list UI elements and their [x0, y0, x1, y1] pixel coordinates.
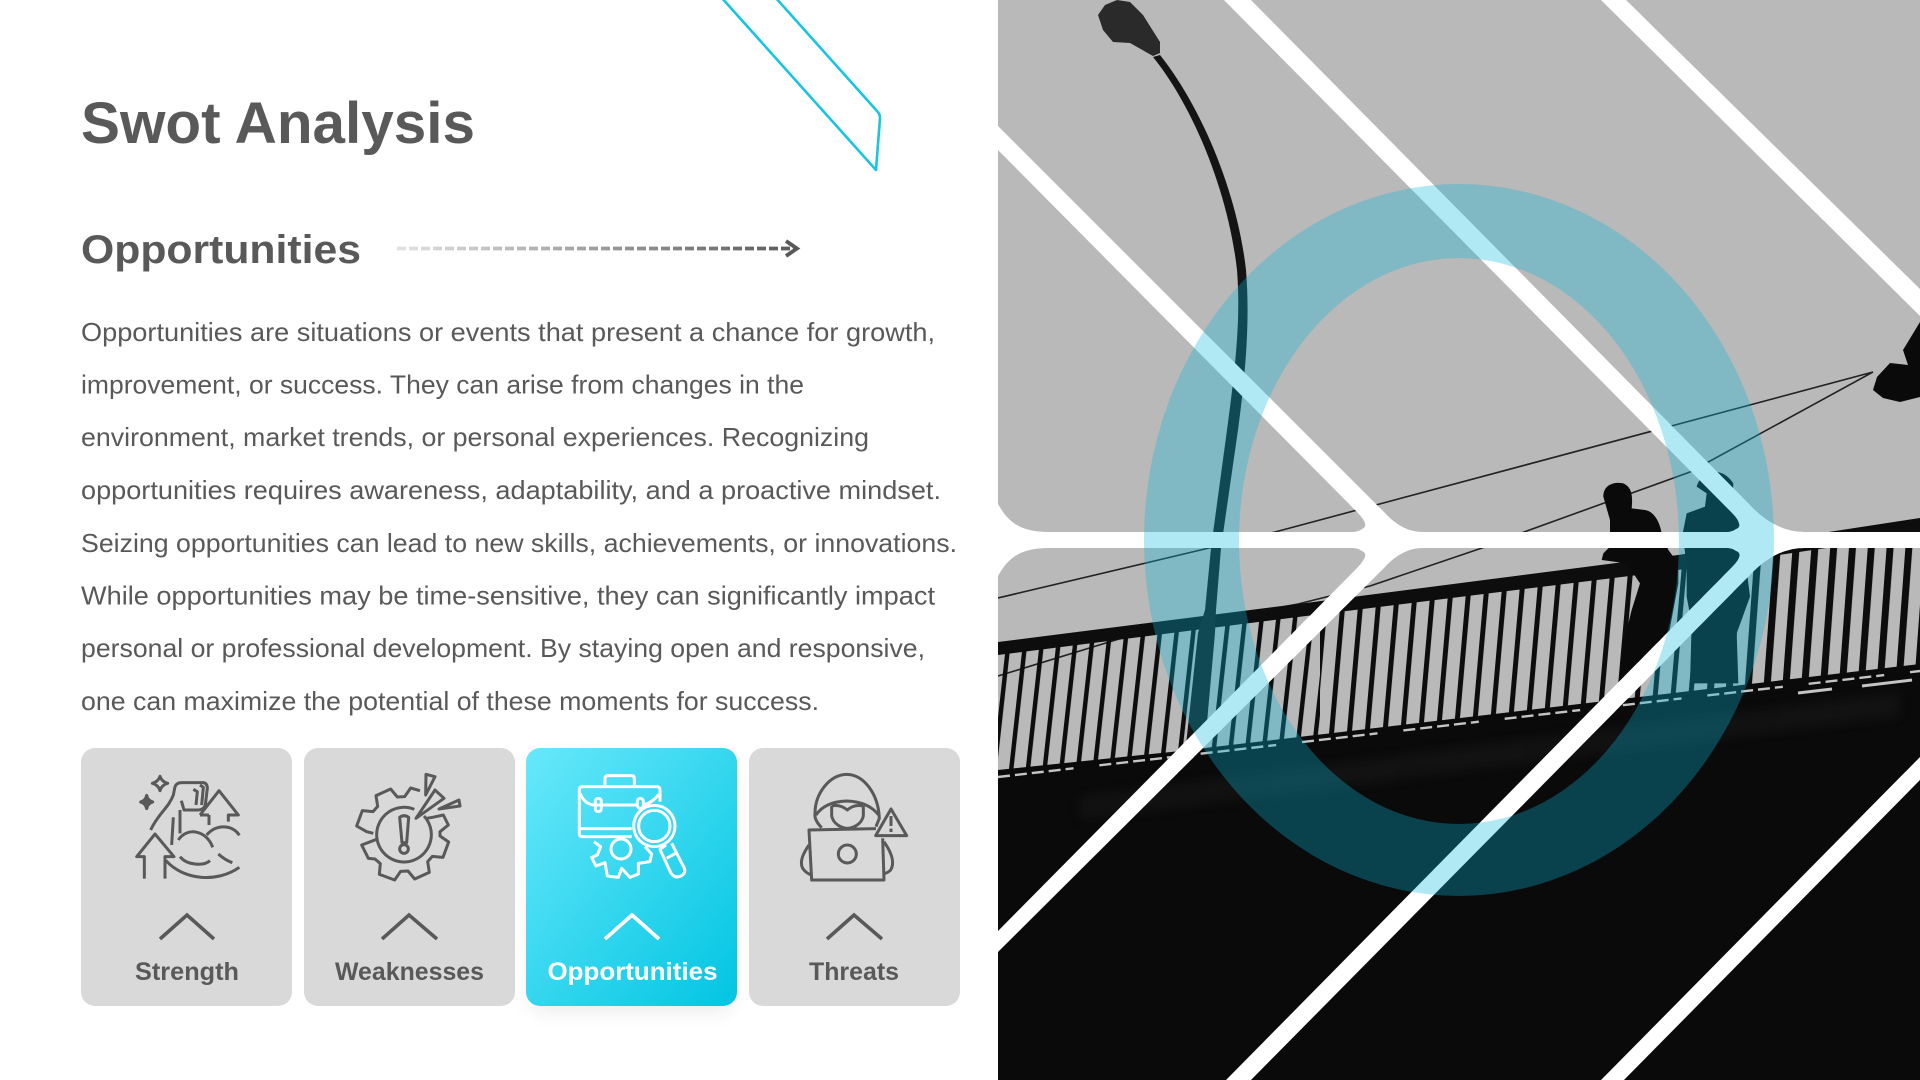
label: Strength [135, 958, 239, 986]
decorative cyan outline [721, 0, 880, 170]
card background [526, 748, 737, 1006]
body text: Opportunities are situations or events that present a chance for growth, [81, 317, 935, 347]
card shadow [530, 756, 733, 1012]
bridge railing balusters far left [998, 610, 1320, 774]
chevron [605, 915, 659, 939]
panel: photo with diagonal white stripes [998, 0, 1920, 1080]
label: Threats [809, 958, 899, 986]
card: Strength [81, 748, 292, 1006]
card: Opportunities (active) [526, 748, 737, 1012]
title: Swot Analysis [81, 91, 475, 156]
body text: While opportunities may be time-sensitive, they can significantly impact [81, 580, 936, 610]
icon: briefcase, magnifier and gear [579, 776, 685, 877]
body text: one can maximize the potential of these moments for success. [81, 686, 819, 716]
lower edge dashes [1798, 680, 1912, 693]
card: Weaknesses [304, 748, 515, 1006]
bridge deck and dark foreground [998, 664, 1920, 1080]
label: Opportunities [548, 958, 718, 986]
bridge railing balusters middle [1320, 568, 1700, 734]
bridge railing balusters right [1700, 548, 1920, 689]
lamp head [1098, 0, 1160, 56]
icon: flexing arm with arrows [137, 776, 239, 879]
dark object at right edge [1873, 322, 1920, 402]
letter O overlay [1144, 184, 1774, 896]
concrete texture [1132, 740, 1584, 795]
arrow: dashed gradient [397, 241, 797, 256]
section heading: Opportunities [81, 228, 361, 272]
sky [998, 0, 1920, 1080]
person right [1683, 472, 1750, 683]
chevron [382, 915, 437, 939]
body text: environment, market trends, or personal experiences. Recognizing [81, 422, 869, 452]
body text [81, 317, 957, 716]
lamp post [1153, 55, 1248, 745]
bridge top rail [998, 518, 1920, 655]
card: Threats [749, 748, 960, 1006]
label: Weaknesses [335, 958, 484, 986]
icon: broken gear with warning [357, 774, 460, 880]
body text: opportunities requires awareness, adaptability, and a proactive mindset. [81, 475, 941, 505]
people silhouettes [1602, 472, 1750, 683]
chevron [827, 915, 882, 939]
chevron [160, 915, 214, 939]
body text: personal or professional development. By staying open and responsive, [81, 633, 925, 663]
body text: improvement, or success. They can arise from changes in the [81, 370, 804, 400]
icon: hacker with laptop and warning [801, 774, 907, 880]
bridge edge dashes [998, 671, 1920, 777]
body text: Seizing opportunities can lead to new skills, achievements, or innovations. [81, 528, 957, 558]
wires [998, 372, 1873, 676]
person left [1602, 483, 1678, 680]
